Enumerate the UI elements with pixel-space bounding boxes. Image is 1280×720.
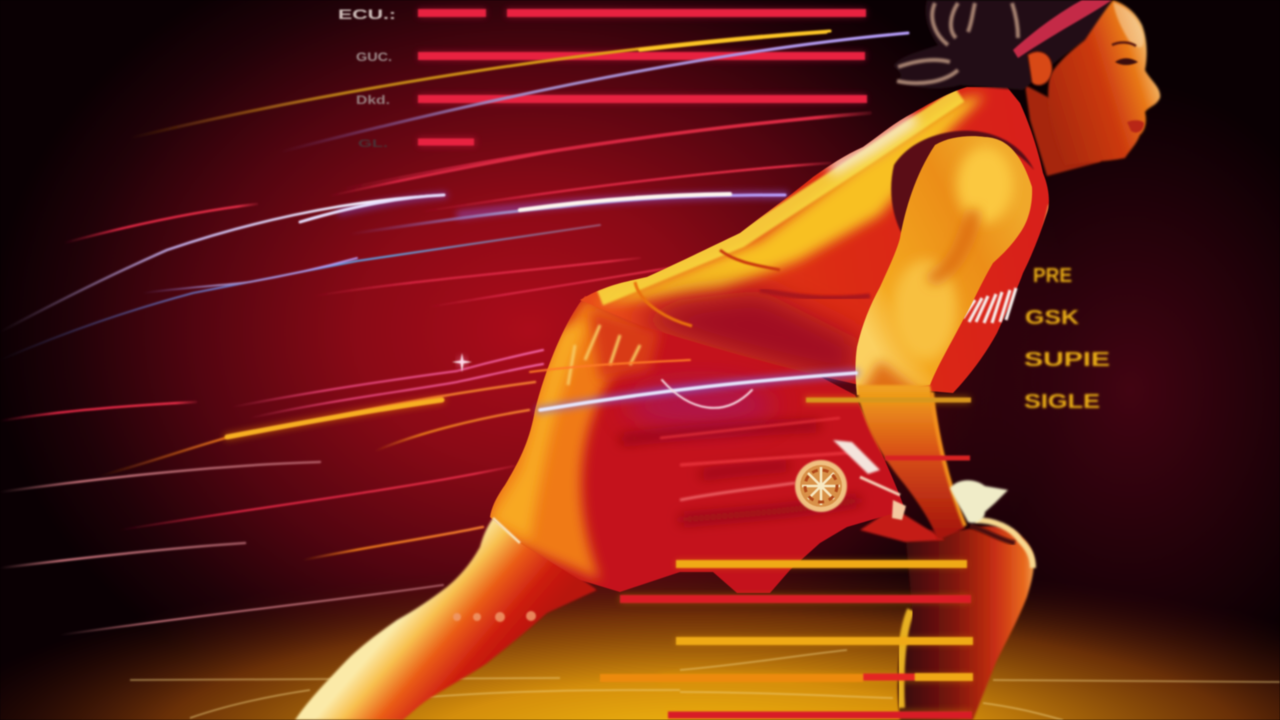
thigh — [860, 508, 945, 542]
neck — [1025, 85, 1110, 176]
left data labels: GL. — [358, 138, 388, 150]
shin yellow edge — [900, 610, 911, 708]
right data labels — [1024, 265, 1110, 413]
right data labels: GSK — [1025, 307, 1080, 329]
left data labels: Dkd. — [356, 93, 390, 107]
forearm — [857, 385, 965, 540]
athlete — [295, 0, 1160, 720]
ear — [1028, 52, 1052, 85]
hand — [950, 480, 1008, 523]
left data labels: ECU.: — [338, 6, 396, 22]
top left bar chart — [418, 13, 867, 142]
shorts side stripe — [833, 440, 880, 474]
lips — [1127, 120, 1144, 133]
right data labels: SUPIE — [1024, 349, 1110, 371]
knee highlight — [975, 520, 1033, 568]
back leg — [295, 518, 597, 720]
speed light streaks — [0, 31, 908, 635]
headband — [1013, 0, 1112, 58]
hair — [893, 0, 1113, 90]
star spark — [452, 353, 472, 372]
face highlight — [1113, 2, 1143, 47]
eye — [1115, 58, 1138, 65]
shorts logo badge — [795, 460, 847, 512]
lower bar chart — [600, 400, 973, 715]
right data labels: PRE — [1033, 265, 1072, 287]
front lower leg — [898, 526, 1034, 720]
face — [1048, 0, 1160, 165]
jersey white lettering — [963, 288, 1016, 323]
glow layer — [227, 195, 785, 437]
streak crossing athlete — [530, 360, 856, 410]
shorts — [490, 296, 906, 594]
left data labels — [338, 6, 396, 150]
arm — [854, 135, 1033, 396]
jersey — [570, 80, 1060, 400]
armhole dark trim — [891, 131, 1034, 234]
right data labels: SIGLE — [1024, 391, 1100, 413]
knee dots — [453, 611, 536, 622]
court floor glow — [0, 540, 1280, 720]
shorts hem — [493, 518, 520, 543]
left data labels: GUC. — [356, 50, 392, 64]
